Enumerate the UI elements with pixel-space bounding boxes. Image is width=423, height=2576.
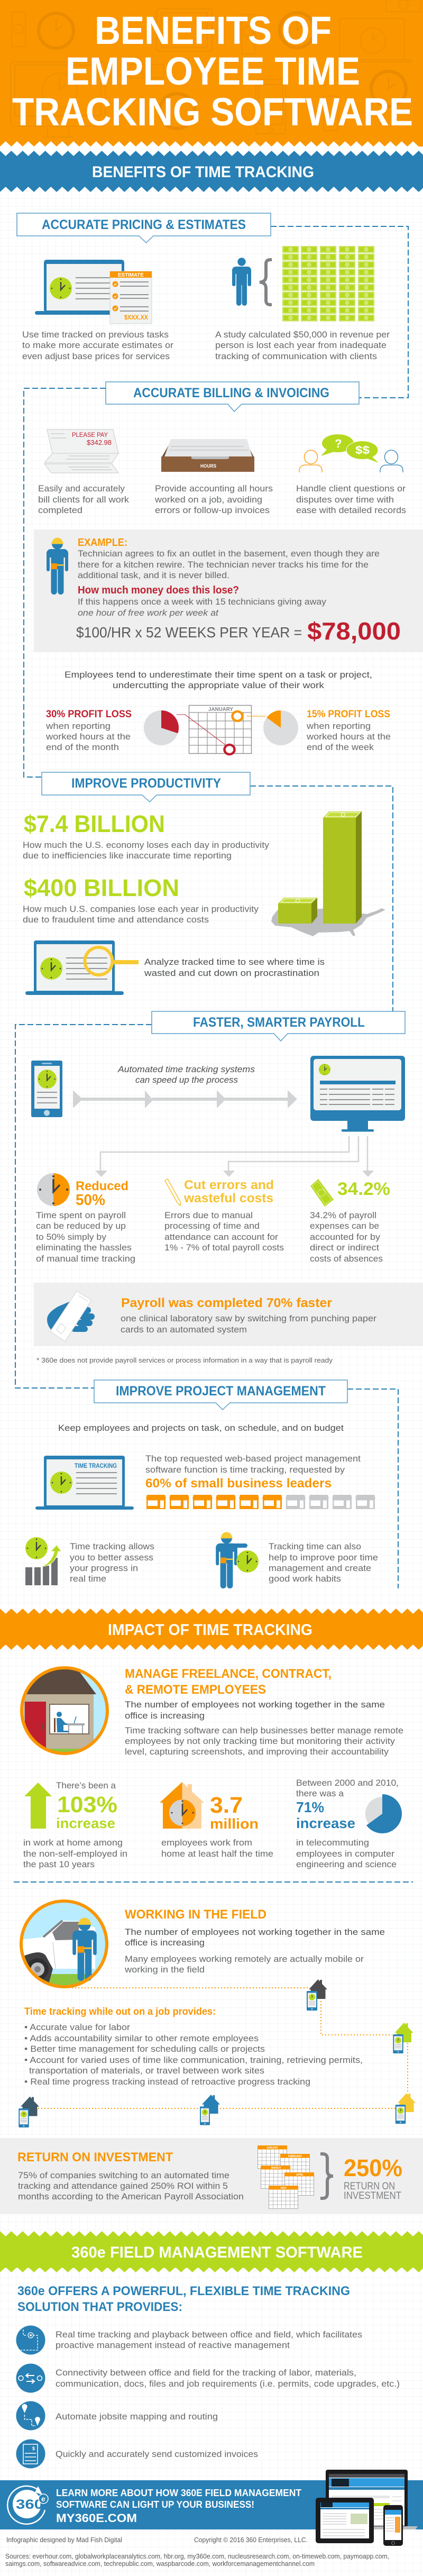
stat: 250% [344,2154,402,2202]
chart: 30% pie [144,710,179,745]
stat: 3.7 million: employees work from [161,1838,252,1848]
text: number of employees [125,1928,385,1948]
title: EMPLOYEE TIME [66,49,360,93]
icon: technician pointing at clock [216,1532,259,1588]
stat: 15% profit loss: when reporting [306,721,371,731]
text: roi: 75% of companies switching to an automated time [18,2171,229,2180]
stat: 3.7 million [160,1782,273,1859]
result: $78,000: $78,000 [307,617,401,645]
icon: technician and van [16,1900,111,1990]
text: good work habits: good work habits [269,1574,341,1584]
sources: saimgs.com, softwareadvice.com, techrepublic.com, waspbarcode.com, workforcemanagementchannel.com [5,2560,315,2568]
benefit: cut errors and wasteful costs: processing of time and [164,1221,260,1231]
benefit: reduced 50%: of manual time tracking [36,1254,135,1264]
list: field time tracking benefits: transportation of materials, or travel between work sites [29,2066,264,2076]
stat: 71% increase: in telecommuting [296,1838,369,1848]
benefit: 34.2%: direct or indirect [310,1243,379,1253]
benefit: reduced 50%: Reduced [76,1179,128,1193]
feature: connectivity [16,2363,400,2393]
section banner: 360e field management software: 360e FIELD MANAGEMENT SOFTWARE [71,2244,363,2261]
sources: Sources: everhour.com, globalworkplaceanalytics.com, hbr.org, my360e.com, nucleusresearch.com, on-timeweb.com, paymoapp.com, [5,2553,389,2560]
text: keep employees on task: Keep employees and projects on task, on schedule, and on budget [58,1423,344,1433]
heading: faster, smarter payroll [152,1011,405,1041]
text: accounting hours: errors or follow-up invoices [155,506,270,515]
icon: five month calendars: JANUARY [266,2146,278,2150]
panel: faster, smarter payroll [31,1011,423,1364]
example text: there for a kitchen rewire. The technician never tracks his time for the [78,560,369,570]
stat: 30% profit loss: when reporting [45,721,111,731]
stat: 71% increase: employees in computer [296,1849,395,1859]
footer call to action [0,2470,423,2546]
subheading: time tracking while out on a job: Time tracking while out on a job provides: [24,2006,216,2017]
icon: green bill [310,1179,334,1207]
icon: hours tray: HOURS [200,463,216,469]
text: estimates: Use time tracked on previous tasks [22,330,169,340]
stat: 103% increase: in work at home among [23,1838,123,1848]
text: client disputes: ease with detailed records [296,506,406,515]
icon: five month calendars [258,2145,314,2209]
list: field time tracking benefits [24,2023,363,2087]
icon: laptop time tracking [35,1456,134,1510]
panel: working in the field [16,1900,416,2127]
stat: 3.7 million: million [210,1816,259,1832]
feature: invoices [16,2440,258,2468]
benefit: reduced 50%: eliminating the hassles [36,1243,132,1253]
stat: $7.4 billion: due to inefficiencies like inaccurate time reporting [23,851,232,861]
text: roi [18,2171,244,2202]
heading: manage freelance: & REMOTE EMPLOYEES [125,1683,266,1697]
section banner: benefits of time tracking: BENEFITS OF TIME TRACKING [92,163,314,181]
stat: $400 billion: How much U.S. companies lose each year in productivity [23,905,259,914]
panel: manage remote employees [16,1666,403,1869]
text: many employees: working in the field [124,1965,205,1975]
icon: folded invoice: $342.98 [87,439,112,446]
text: time tracking software: Time tracking software can help businesses better manage remote [125,1726,403,1735]
text: call to action: LEARN MORE ABOUT HOW 360E FIELD MANAGEMENT [56,2488,301,2498]
text: many employees [124,1954,364,1975]
text: automated time tracking: can speed up the process [135,1075,238,1085]
stat: $7.4 billion: How much the U.S. economy loses each day in productivity [23,841,270,850]
icon: green up arrow [24,1783,52,1829]
heading: faster, smarter payroll: FASTER, SMARTER PAYROLL [193,1015,365,1030]
feature: real time tracking: proactive management instead of reactive management [56,2341,290,2350]
text: accounting hours: worked on a job, avoiding [154,495,262,505]
stat: 15% profit loss: 15% PROFIT LOSS [307,709,390,720]
text: revenue lost [215,330,390,361]
benefit: reduced 50%: to 50% simply by [36,1232,107,1242]
heading: accurate billing and invoicing [106,382,359,412]
sources [5,2553,389,2568]
panel: accurate pricing and estimates [17,213,390,361]
text: top requested function [145,1454,361,1475]
text: number of employees: The number of employees not working together in the same [125,1928,385,1937]
text: call to action: MY360E.COM [56,2511,137,2525]
text: revenue lost: tracking of communication with clients [215,352,377,361]
callout: payroll 70% faster: one clinical laboratory saw by switching from punching paper [121,1314,377,1323]
stat: 30% profit loss: end of the month [46,743,119,752]
icon: folded invoice: PLEASE PAY [72,431,108,439]
stat: $400 billion [23,874,259,925]
feature: connectivity: Connectivity between office and field for the tracking of labor, materials, [56,2368,356,2378]
benefit: cut errors and wasteful costs: wasteful costs [183,1191,273,1205]
icon: desktop monitor [310,1056,405,1132]
stat: 71% increase: increase [296,1815,355,1831]
list: field time tracking benefits: • Better time management for scheduling calls or projects [24,2044,265,2054]
text: number of employees [125,1700,385,1721]
heading: accurate billing and invoicing: ACCURATE BILLING & INVOICING [133,386,329,400]
panel: accurate billing and invoicing [34,382,423,754]
stat: 103% increase: the past 10 years [23,1860,95,1869]
text: top requested function: software function is time tracking, requested by [145,1465,345,1475]
stat: 103% increase: There’s been a [56,1781,116,1791]
feature: invoices: Quickly and accurately send customized invoices [56,2450,258,2459]
icon: pencil [165,1179,180,1205]
callout: payroll 70% faster: Payroll was completed 70% faster [121,1296,332,1310]
icon: laptop with magnifier [25,940,139,995]
question text: one hour of free work per week at [78,608,219,618]
icon: phone with clock [31,1061,62,1117]
stat: 15% profit loss: end of the week [307,743,374,752]
icon: people with speech bubbles: ? [335,437,342,450]
text: good work habits: Tracking time can also [269,1542,361,1551]
icon row: 6 of 10 stores [146,1495,375,1509]
benefit: cut errors and wasteful costs: attendance can account for [164,1232,279,1242]
example text: Technician agrees to fix an outlet in the basement, even though they are [78,549,380,559]
icon: january calendar [177,706,266,754]
section banner: impact of time tracking: IMPACT OF TIME TRACKING [108,1621,312,1639]
heading: 360e offers [17,2284,350,2314]
panel: 360e solution [16,2284,400,2468]
text: client disputes [296,484,406,515]
text: employees underestimate: Employees tend to underestimate their time spent on a task or project, [65,670,372,680]
icon: house with clock [160,1782,204,1829]
text: employees underestimate [65,670,372,690]
text: many employees: Many employees working remotely are actually mobile or [125,1954,364,1964]
feature: mapping: Automate jobsite mapping and routing [56,2412,218,2422]
title: BENEFITS OF [95,8,332,52]
stat: 71% increase: Between 2000 and 2010, [296,1778,399,1788]
icon: five month calendars: MAY [281,2187,287,2190]
heading: return on investment: RETURN ON INVESTMENT [17,2150,173,2164]
text: assess progress: Time tracking allows [70,1542,154,1551]
stat: 30% profit loss: 30% PROFIT LOSS [46,709,132,720]
benefit: 34.2%: 34.2% [337,1179,390,1199]
stat: 250%: RETURN ON [344,2181,395,2192]
text: estimates [22,330,174,361]
icon: invoice document: $ [32,2446,35,2451]
feature: mapping [16,2401,218,2430]
stat: 71% increase [296,1778,402,1869]
list: field time tracking benefits: • Real time progress tracking instead of retroactive progress tracking [24,2077,310,2087]
example heading: EXAMPLE: [78,537,127,549]
stat: 3.7 million: 3.7 [210,1793,243,1818]
icon: laptop with clock and estimate: ESTIMATE [118,272,144,278]
text: revenue lost: A study calculated $50,000 in revenue per [215,330,390,340]
stat: 71% increase: engineering and science [296,1860,397,1869]
icon: laptop with clock and estimate: $XXX.XX [124,315,148,321]
text: estimates: to make more accurate estimates or [22,341,174,350]
icon: people with speech bubbles: $$ [355,444,370,456]
text: number of employees: office is increasing [125,1711,205,1721]
panel: improve productivity [23,772,385,995]
stat: $400 billion: due to fraudulent time and attendance costs [23,915,209,925]
stat: 15% profit loss: worked hours at the [306,732,391,742]
stat: $400 billion: $400 BILLION [24,874,179,901]
text: analyze tracked time: wasted and cut down on procrastination [144,969,319,978]
stat: 71% increase: there was a [296,1789,344,1798]
route: dotted path between job sites [19,1979,416,2127]
stat: 103% increase: the non-self-employed in [23,1849,127,1859]
text: bill clients [38,484,130,515]
text: good work habits: management and create [269,1564,371,1573]
icon: half-orange clock [37,1173,70,1206]
credit: designer: Infographic designed by Mad Fish Digital [6,2536,122,2544]
benefit: reduced 50%: Time spent on payroll [36,1211,126,1220]
text: accounting hours: Provide accounting all hours [155,484,273,494]
callout: payroll 70% faster [34,1283,423,1346]
callout: payroll 70% faster: cards to an automated system [121,1325,247,1335]
question heading: How much money does this lose? [78,584,239,596]
chart: money bars on US map [271,811,385,936]
benefit: 34.2% [310,1179,390,1264]
heading: working in the field: WORKING IN THE FIELD [125,1907,266,1922]
title [12,8,413,134]
heading: manage freelance: MANAGE FREELANCE, CONTRACT, [125,1667,332,1681]
text: bill clients: completed [38,506,82,515]
icon: house with remote worker [16,1666,111,1757]
benefit: cut errors and wasteful costs: 1% - 7% of total payroll costs [164,1243,284,1253]
stat: 250%: INVESTMENT [344,2190,401,2202]
stat: 30% profit loss: worked hours at the [45,732,131,742]
stat: 15% profit loss [306,709,391,752]
text: time tracking software: level, capturing screenshots, and improving their accountability [125,1747,389,1757]
devices: laptop, tablet, phone [316,2470,418,2546]
benefit: cut errors and wasteful costs: Cut errors and [184,1178,274,1192]
heading: improve project management [94,1380,347,1410]
heading: improve project management: IMPROVE PROJECT MANAGEMENT [116,1384,326,1399]
stat: $7.4 billion [23,810,270,861]
benefit: 34.2%: costs of absences [310,1254,383,1264]
icon: invoice document [16,2440,45,2468]
text: automated time tracking [117,1065,255,1085]
text: time tracking software: employees by not only tracking time but monitoring their activity [125,1737,396,1746]
list: field time tracking benefits: • Account for varied uses of time like communication, training, retrieving permits, [24,2056,363,2065]
benefit: cut errors and wasteful costs [164,1178,284,1253]
panel: example calculation [34,529,423,652]
heading: accurate pricing and estimates: ACCURATE PRICING & ESTIMATES [42,217,246,232]
text: bill clients: Easily and accurately [38,484,125,494]
benefit: reduced 50%: can be reduced by up [36,1221,126,1231]
section banner: impact of time tracking [0,1609,423,1650]
stat: 103% increase [23,1781,127,1869]
text: assess progress: you to better assess [70,1553,153,1563]
list: field time tracking benefits: • Accurate value for labor [24,2023,131,2032]
credit: copyright: Copyright © 2016 360 Enterprises, LLC. [194,2536,308,2544]
icon: hours tray [161,439,254,472]
text: client disputes: Handle client questions or [296,484,406,494]
benefit: cut errors and wasteful costs: Errors due to manual [164,1211,253,1220]
text: automated time tracking: Automated time tracking systems [117,1065,255,1074]
text: assess progress: real time [70,1574,106,1584]
text: top requested function: The top requested web-based project management [145,1454,361,1464]
heading: accurate pricing and estimates [17,213,271,243]
arrows: monitor to payroll benefits [95,1136,374,1177]
heading: improve productivity [42,772,250,802]
text: client disputes: disputes over time with [296,495,394,505]
list: field time tracking benefits: • Adds accountability similar to other remote employees [24,2034,259,2043]
panel: return on investment [0,2138,423,2214]
logo: 360e: e [41,2495,45,2503]
heading: improve productivity: IMPROVE PRODUCTIVITY [71,776,221,791]
text: time tracking software [125,1726,403,1757]
text: revenue lost: person is lost each year from inadequate [215,341,387,350]
benefit: 34.2%: expenses can be [310,1221,379,1231]
question text: If this happens once a week with 15 technicians giving away [78,597,327,607]
text: number of employees: office is increasing [125,1938,205,1948]
icon: laptop time tracking: TIME TRACKING [75,1463,117,1469]
stat: $7.4 billion: $7.4 BILLION [24,810,165,837]
formula: $100/HR x 52 WEEKS PER YEAR = [76,624,302,641]
text: assess progress [70,1542,154,1584]
zigzag edge under header [0,141,419,147]
icon: five month calendars: MARCH [271,2167,281,2170]
benefit: reduced 50% [36,1173,135,1264]
icon: january calendar: JANUARY [208,707,233,712]
footnote: * 360e does not provide payroll services or process information in a way that is payroll ready [36,1356,333,1364]
feature: real time tracking: Real time tracking and playback between office and field, which facilitates [56,2330,362,2340]
text: analyze tracked time [144,957,325,978]
example text [78,549,380,580]
chart: 71% pie [365,1794,402,1833]
background icons: clocks, devices and bills [11,0,421,137]
chart: 15% pie [263,710,298,745]
text: estimates: even adjust base prices for services [22,352,170,361]
question text [78,597,327,618]
stat: 3.7 million: home at least half the time [161,1849,273,1859]
heading: 360e offers: SOLUTION THAT PROVIDES: [17,2300,182,2314]
feature: connectivity: communication, docs, files and job requirements (i.e. permits, code upgrades, etc.) [56,2379,400,2389]
logo: 360e: 360 [16,2497,43,2512]
text: number of employees: The number of employees not working together in the same [125,1700,385,1710]
text: good work habits [269,1542,378,1584]
panel: improve project management [24,1380,378,1588]
stat: 250%: 250% [344,2154,402,2181]
feature: real time tracking [16,2325,362,2355]
benefit: reduced 50%: 50% [76,1192,105,1209]
text: call to action [56,2488,301,2525]
icon: five month calendars: FEBRUARY [288,2155,302,2158]
icon: five month calendars: APRIL [296,2173,304,2177]
text: roi: tracking and attendance gained 250% ROI within 5 [18,2181,228,2191]
icon: brace [320,2154,333,2198]
icon: hand holding punch card [47,1291,95,1341]
text: analyze tracked time: Analyze tracked time to see where time is [144,957,325,967]
text: roi: months according to the American Payroll Association [18,2192,244,2202]
section banner: benefits of time tracking [0,151,423,192]
example text: additional task, and it is never billed. [78,571,229,580]
stat: 30% profit loss [45,709,132,752]
icon: map route [16,2401,45,2430]
icon: playback target [16,2325,45,2355]
text: assess progress: your progress in [70,1564,138,1573]
stat: 103% increase: increase [56,1815,115,1831]
icon: clock with growth bars [24,1537,61,1585]
heading: manage freelance [125,1667,332,1697]
stat: 71% increase: 71% [296,1799,324,1815]
stat: 60% of small business leaders: 60% of small business leaders [145,1476,332,1491]
text: call to action: SOFTWARE CAN LIGHT UP YOUR BUSINESS! [56,2499,254,2510]
stat: 103% increase: 103% [57,1792,117,1817]
icon: technician [47,537,68,595]
icon: person equals stack of money [232,246,374,322]
icon: people with speech bubbles [299,434,403,472]
icon: folded invoice [44,430,118,473]
logo: 360e [7,2486,48,2524]
text: good work habits: help to improve poor time [269,1553,378,1563]
icon: exchange arrows [16,2363,45,2393]
arrow: phone to monitor [73,1090,297,1108]
icon: laptop with clock and estimate [35,260,152,324]
heading: 360e offers: 360e OFFERS A POWERFUL, FLEXIBLE TIME TRACKING [17,2284,350,2298]
benefit: 34.2%: accounted for by [310,1232,381,1242]
section banner: 360e field management software [0,2231,423,2272]
text: employees underestimate: undercutting the appropriate value of their work [113,681,325,690]
text: accounting hours [154,484,273,515]
benefit: 34.2%: 34.2% of payroll [310,1211,376,1220]
header banner [0,0,423,147]
text: bill clients: bill clients for all work [38,495,130,505]
